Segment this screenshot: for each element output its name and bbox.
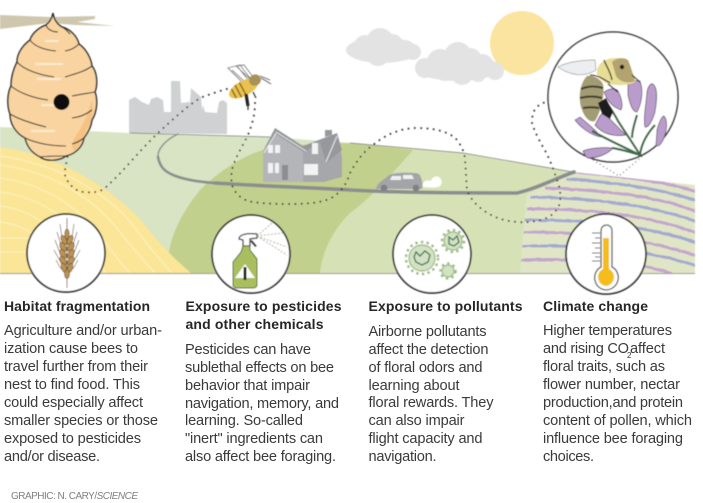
body: climate change: flower number, nectar — [543, 377, 680, 393]
circle icon: pollutant particles — [393, 215, 471, 293]
body: pesticides — [185, 342, 339, 465]
text column: pollutants — [368, 298, 523, 465]
body: habitat fragmentation: nest to find food. This — [4, 377, 140, 393]
house — [262, 128, 342, 182]
body: climate change: content of pollen, which — [543, 413, 692, 429]
circle icon: wheat — [27, 214, 105, 292]
landscape: darker green field — [168, 143, 413, 273]
body: pollutants: learning about — [368, 378, 460, 394]
body: pesticides: learning. So-called — [185, 413, 303, 429]
body: climate change: production,and protein — [543, 395, 683, 411]
heading: pesticides: and other chemicals — [186, 316, 324, 332]
landscape: light green hill — [0, 127, 573, 273]
body: pollutants — [368, 324, 494, 465]
flower — [575, 81, 667, 158]
body: pesticides: behavior that impair — [185, 378, 310, 394]
body: pollutants: can also impair — [368, 413, 465, 429]
heading: habitat fragmentation: Habitat fragmentation — [4, 298, 150, 314]
clouds — [346, 28, 504, 85]
landscape: striped flower field — [519, 172, 697, 274]
landscape: middle green meadow — [300, 143, 573, 273]
landscape: yellow crop field — [0, 147, 191, 273]
city skyline — [129, 81, 227, 134]
text column: habitat fragmentation — [4, 298, 162, 465]
beehive — [8, 13, 97, 160]
circle icon: thermometer — [566, 214, 646, 294]
small flying bee — [226, 65, 271, 110]
body: pollutants: affect the detection — [368, 342, 488, 358]
flight path dotted line — [65, 88, 650, 222]
body: climate change: Higher temperatures — [543, 323, 672, 339]
text column: climate change — [543, 298, 692, 465]
body: pollutants: flight capacity and — [368, 431, 482, 447]
body: habitat fragmentation — [4, 323, 162, 465]
body: climate change: choices. — [543, 449, 594, 465]
body: climate change — [543, 323, 692, 465]
body: climate change: 2 — [627, 351, 632, 360]
credit line: GRAPHIC: N. CARY/SCIENCE — [11, 491, 138, 502]
body: pesticides: navigation, memory, and — [185, 396, 339, 412]
heading: pollutants: Exposure to pollutants — [368, 298, 523, 314]
body: habitat fragmentation: ization cause bees to — [4, 341, 138, 357]
body: habitat fragmentation: Agriculture and/or urban- — [4, 323, 162, 339]
body: pesticides: also affect bee foraging. — [185, 449, 336, 465]
body: climate change: and rising CO — [543, 341, 629, 357]
body: habitat fragmentation: could especially affect — [4, 395, 143, 411]
body: habitat fragmentation: travel further from their — [4, 359, 148, 375]
body: habitat fragmentation: smaller species or those — [4, 413, 158, 429]
heading: pesticides: Exposure to pesticides — [186, 298, 342, 314]
road — [158, 134, 574, 193]
circle icon: pesticide spray bottle — [212, 215, 290, 293]
body: pollutants: navigation. — [368, 449, 436, 465]
big circle: bee on flower — [548, 32, 678, 162]
text column: pesticides — [185, 298, 342, 465]
body: habitat fragmentation: exposed to pesticides — [4, 431, 141, 447]
heading: pesticides — [186, 298, 342, 332]
body: pesticides: sublethal effects on bee — [185, 360, 334, 376]
big bee — [558, 58, 640, 121]
horizon and ground lines — [130, 133, 573, 172]
body: pollutants: floral rewards. They — [368, 395, 494, 411]
body: pesticides: "inert" ingredients can — [185, 431, 323, 447]
sun — [490, 11, 554, 75]
body: climate change: affect — [630, 341, 665, 357]
body: pesticides: Pesticides can have — [185, 342, 311, 358]
body: climate change: influence bee foraging — [543, 431, 683, 447]
body: pollutants: Airborne pollutants — [368, 324, 486, 340]
body: habitat fragmentation: and/or disease. — [4, 449, 100, 465]
tree branch — [0, 15, 115, 29]
body: climate change: floral traits, such as — [543, 359, 665, 375]
heading: climate change: Climate change — [543, 298, 648, 314]
car with exhaust — [376, 173, 442, 191]
body: pollutants: of floral odors and — [368, 360, 482, 376]
